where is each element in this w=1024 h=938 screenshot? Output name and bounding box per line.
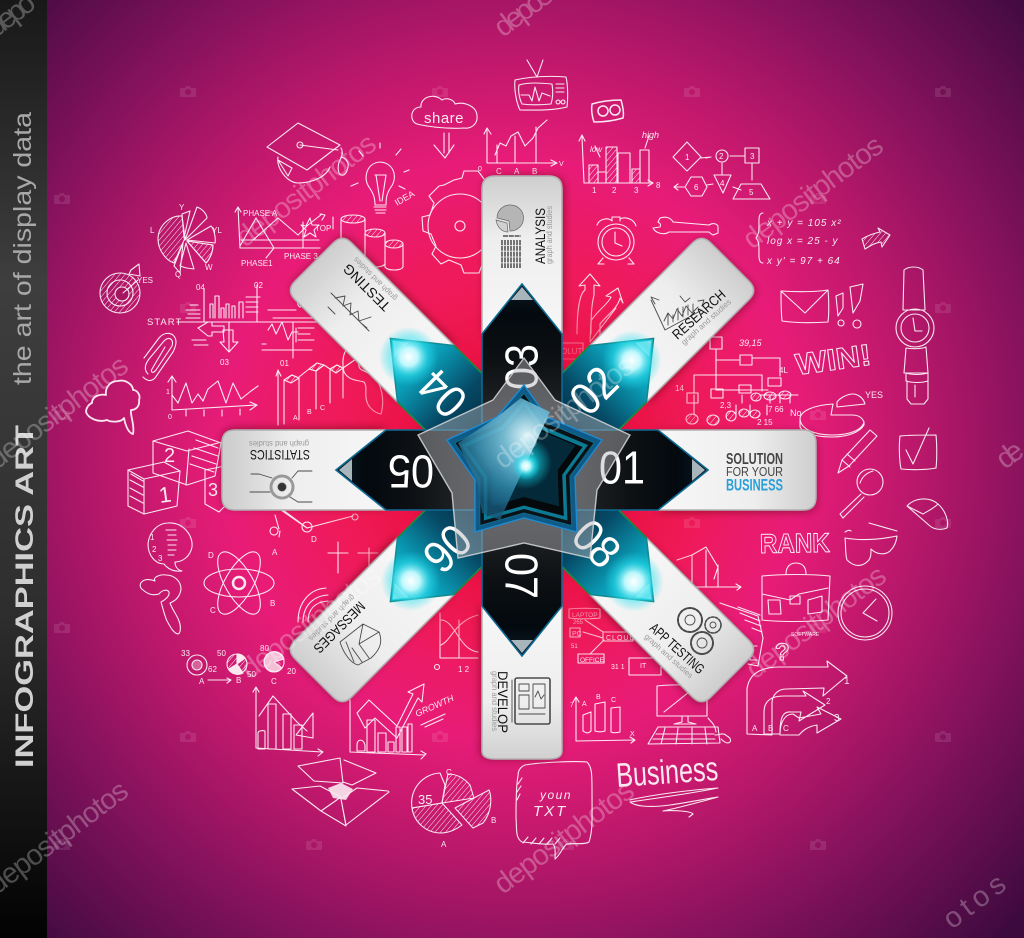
doodle: desktop computer xyxy=(648,685,731,744)
doodle: growth chart: GROWTH xyxy=(414,693,456,719)
doodle: concentric arcs behind messages xyxy=(298,588,328,622)
doodle: cloud computing diagram: OFFICE xyxy=(580,657,604,664)
doodle: network under statistics xyxy=(270,510,358,544)
arm 08 app testing xyxy=(494,442,758,706)
doodle: math equations: log x = 25 - y xyxy=(767,236,839,247)
doodle: sunglasses xyxy=(845,523,897,565)
doodle: thought cloud xyxy=(86,381,140,434)
doodle: org chart: 14 xyxy=(675,384,684,393)
doodle: growth chart xyxy=(350,684,456,759)
doodle: your txt speech bubble: TXT xyxy=(533,803,567,820)
doodle: high-low bar chart: 8 xyxy=(656,181,661,190)
doodle: atom xyxy=(204,546,278,620)
doodle: start timeline: 04 xyxy=(196,283,205,292)
arm 05 statistics: graph and studies xyxy=(249,439,309,448)
doodle: phase line chart xyxy=(235,207,333,268)
doodle: hidden arrows behind arms xyxy=(561,274,623,359)
doodle: high-low bar chart: 3 xyxy=(634,186,639,195)
doodle: mountain chart: 0 xyxy=(478,166,482,173)
doodle: wave line chart: 0 xyxy=(168,414,172,421)
doodle: wave line chart: 1 xyxy=(166,389,170,396)
doodle: three direction arrows: A xyxy=(752,724,758,733)
doodle: dragon tail shape xyxy=(343,350,383,414)
doodle: list speech bubble: 2 xyxy=(152,545,157,554)
doodle: hatched pie chart left xyxy=(150,203,222,279)
label solution for your business: BUSINESS xyxy=(726,476,783,494)
doodle: phase line chart: PHASE 3 xyxy=(284,252,318,261)
inner star layers xyxy=(447,385,602,532)
doodle: go tag xyxy=(592,100,623,122)
doodle: atom: D xyxy=(208,551,214,560)
arm 03 analysis xyxy=(482,176,562,470)
doodle: checkbox xyxy=(899,428,937,470)
doodle: business lettering: Business xyxy=(615,750,719,795)
doodle: wave line chart xyxy=(166,376,258,421)
doodle: book stack xyxy=(720,603,763,666)
doodle: three mini pies: 50 xyxy=(217,649,226,658)
doodle: three mini pies: 20 xyxy=(287,667,296,676)
doodle: lower pie chart: B xyxy=(491,816,496,825)
doodle: business lettering xyxy=(615,750,719,817)
arm 02 research xyxy=(494,234,758,498)
doodle: three mini pies: 33 xyxy=(181,649,190,658)
label statistics: STATISTICS xyxy=(250,447,310,463)
doodle: open box xyxy=(292,758,389,826)
doodle: hatched pie chart left: Q xyxy=(175,270,181,279)
number 06: 06 xyxy=(413,514,482,583)
doodle: abc bar chart: B xyxy=(596,694,601,701)
doodle: abc bar chart xyxy=(570,694,635,743)
doodle: gear xyxy=(422,171,519,273)
arm 05 statistics xyxy=(222,430,522,510)
doodle: wave chart: 1 2 xyxy=(458,665,470,674)
doodle: three direction arrows xyxy=(747,661,850,735)
doodle: three mini pies: 62 xyxy=(208,665,217,674)
doodle: light bulb idea: IDEA xyxy=(393,189,416,208)
icon: gears xyxy=(678,608,721,654)
doodle: start timeline: 01 xyxy=(280,359,289,368)
icon: testing chart xyxy=(328,293,371,331)
doodle: coin pie: No xyxy=(790,408,802,418)
doodle: high-low bar chart: 2 xyxy=(612,186,617,195)
doodle: flowchart: 5 xyxy=(749,188,754,197)
doodle: flowchart: 6 xyxy=(694,183,699,192)
doodle: briefcase xyxy=(762,563,830,622)
doodle: exclamation marks xyxy=(836,284,863,328)
doodle: cross figures xyxy=(328,542,378,573)
doodle: three direction arrows: 2 xyxy=(826,697,831,706)
doodle: high-low bar chart xyxy=(579,130,661,195)
label messages: MESSAGES xyxy=(311,599,369,657)
doodle: flowchart: 3 xyxy=(750,152,755,161)
doodle: question mark: ? xyxy=(775,639,790,666)
doodle: atom: B xyxy=(270,599,275,608)
doodle: share cloud: share xyxy=(424,110,464,127)
doodle: math equations: x + y = 105 x² xyxy=(766,218,842,229)
doodle: lower pie chart: 35 xyxy=(418,792,432,807)
doodle: your txt speech bubble xyxy=(516,762,592,859)
label analysis: ANALYSIS xyxy=(532,208,548,264)
doodle: three mini pies: 50 xyxy=(247,670,256,679)
arrow 04 xyxy=(359,307,550,498)
doodle: curved small arrow xyxy=(862,228,890,249)
doodle: number cubes: 3 xyxy=(208,480,218,500)
doodle: hatched pie chart left: L xyxy=(150,226,155,235)
doodle: pencil xyxy=(838,430,877,473)
label research: RESEARCH xyxy=(669,286,729,342)
doodle: number cubes: 1 xyxy=(157,481,173,508)
watermarks: depositphotos xyxy=(488,350,641,476)
doodle: paper clip xyxy=(143,333,176,381)
label testing: TESTING xyxy=(340,261,393,314)
watermarks: depositphotos xyxy=(740,560,893,686)
doodle: start timeline: START xyxy=(147,317,182,328)
doodle sketches xyxy=(86,60,948,859)
doodle: mountain chart: B xyxy=(532,167,537,176)
doodle: magnifier xyxy=(840,469,883,518)
doodle: hatched pie chart left: W xyxy=(205,263,213,272)
doodle: cloud computing diagram: 31 1 xyxy=(611,664,625,671)
doodle: hatched pie chart left: YL xyxy=(212,226,222,235)
watermarks: depositphotos xyxy=(230,128,383,254)
strip title: INFOGRAPHICS ART xyxy=(11,425,39,768)
glass star xyxy=(418,358,630,558)
arrow 07 xyxy=(482,470,562,656)
label develop: DEVELOP xyxy=(495,671,511,733)
icon: develop screen xyxy=(512,678,550,724)
doodle: win sketch lettering: WIN! xyxy=(793,339,873,382)
arm 02 research: graph and studies xyxy=(680,297,733,347)
doodle: phase line chart: TOP xyxy=(315,224,331,233)
central star xyxy=(418,358,630,558)
arm 01 solution xyxy=(522,430,816,510)
doodle: list speech bubble xyxy=(148,523,192,571)
number 04: 04 xyxy=(408,359,477,428)
doodle: coin pie: YES xyxy=(865,390,883,400)
doodle: cloud computing diagram: 51 xyxy=(571,644,578,650)
icon: research chart xyxy=(651,296,704,330)
doodle: cloud computing diagram: LAPTOP xyxy=(572,612,598,619)
doodle: org chart: 39,15 xyxy=(739,338,763,348)
doodle: start timeline: 03 xyxy=(220,358,229,367)
doodle: number cubes xyxy=(128,431,225,514)
arrow 06 xyxy=(361,442,550,631)
doodle: three mini pies: 80 xyxy=(260,644,269,653)
doodle: phase line chart: PHASE1 xyxy=(241,259,273,268)
doodle: curly three xyxy=(140,575,181,634)
doodle: mountain chart: V xyxy=(559,161,564,168)
icon: statistics gear xyxy=(250,471,312,502)
doodle: flowchart: 4 xyxy=(720,179,725,188)
doodle: start timeline xyxy=(147,281,325,368)
doodle: cloud computing diagram: PC xyxy=(572,631,582,638)
arrow 05 xyxy=(336,430,522,510)
doodle: phase line chart: PHASE A xyxy=(243,209,278,218)
doodle: mountain chart: C xyxy=(496,167,502,176)
arm 06 messages xyxy=(286,442,550,706)
doodle: graduation cap xyxy=(267,123,348,183)
doodle: wristwatch xyxy=(896,267,934,404)
doodle: cloud computing diagram: CLOUD xyxy=(606,635,636,642)
watermarks: depositphotos xyxy=(235,560,388,686)
camera watermarks xyxy=(54,86,951,850)
number 08: 08 xyxy=(562,509,631,578)
doodle: start timeline: 02 xyxy=(254,281,263,290)
icon: analysis pie and bars xyxy=(496,205,524,268)
glass highlight xyxy=(458,398,550,520)
number 03: 03 xyxy=(496,344,548,390)
doodle: high-low bar chart: 1 xyxy=(592,186,597,195)
arm 04 testing: graph and studies xyxy=(352,255,399,302)
doodle: org chart xyxy=(675,337,798,427)
doodle: 3d bar chart: A xyxy=(293,415,298,422)
doodle: cloud computing diagram xyxy=(569,608,661,675)
doodle: org chart: 2,3 xyxy=(720,401,732,410)
doodle: high-low bar chart: high xyxy=(642,130,659,140)
doodle: three mini pies xyxy=(181,644,296,686)
star glow xyxy=(512,452,540,480)
doodle: coin pie xyxy=(790,390,883,437)
label solution for your business: SOLUTION xyxy=(726,451,783,468)
central shadow xyxy=(317,265,727,675)
doodle: 3d bar chart: B xyxy=(307,409,312,416)
doodle: alarm clock xyxy=(597,217,636,264)
watermarks: depositphotos xyxy=(488,775,641,901)
label solution for your business xyxy=(726,451,783,494)
label app testing: APP TESTING xyxy=(647,620,708,677)
arm 04 testing xyxy=(286,234,550,498)
doodle: list speech bubble: 1 xyxy=(150,533,155,542)
left title strip xyxy=(0,0,47,938)
doodle: computer mouse xyxy=(907,499,948,529)
doodle: spiral target yes xyxy=(100,264,153,313)
doodle: three direction arrows: B xyxy=(768,724,773,733)
doodle: software label: SOFTWARE xyxy=(791,632,820,638)
doodle: 3d bar chart: C xyxy=(320,405,325,412)
doodle: share cloud xyxy=(412,96,477,158)
icon: messages xyxy=(340,624,381,665)
doodle: tv xyxy=(515,60,568,110)
doodle: 3d bar chart xyxy=(276,353,364,425)
doodle: flowchart: 2 xyxy=(719,152,724,161)
doodle: abc bar chart: X xyxy=(630,731,635,738)
doodle: hidden arrows behind arms: OLUT xyxy=(561,347,582,356)
doodle: cylinders xyxy=(341,215,403,270)
arm 07 develop: graph and studies xyxy=(490,671,499,731)
arm 03 analysis: graph and studies xyxy=(545,206,554,264)
arrow 08 xyxy=(494,442,683,631)
doodle: math equations xyxy=(756,213,842,267)
doodle: abc bar chart: C xyxy=(611,697,616,704)
number 01: 01 xyxy=(599,442,645,494)
doodle: abc bar chart: A xyxy=(582,701,587,708)
doodle: flowchart xyxy=(673,142,770,199)
doodle: three direction arrows: C xyxy=(783,724,789,733)
arrow 01 xyxy=(522,430,708,510)
doodle: falling bar chart xyxy=(253,687,323,756)
number 07: 07 xyxy=(495,553,547,599)
doodle: lower pie chart xyxy=(412,768,496,849)
doodle: math equations: x y' = 97 + 64 xyxy=(766,256,841,267)
doodle: wrench xyxy=(653,217,718,235)
doodle: wave chart xyxy=(434,613,478,674)
doodle: mountain chart: A xyxy=(514,167,520,176)
doodle: spiral target yes: YES xyxy=(137,276,153,285)
doodle: mountain chart xyxy=(478,120,564,176)
doodle: rank lettering: RANK xyxy=(760,528,831,559)
doodle: high-low bar chart: low xyxy=(590,145,603,154)
doodle: three mini pies: C xyxy=(271,677,277,686)
doodle: atom: A xyxy=(272,548,278,557)
doodle: light bulb idea xyxy=(351,143,416,213)
label solution for your business: FOR YOUR xyxy=(726,465,783,479)
doodle: envelope xyxy=(781,290,829,323)
doodle: three direction arrows: 3 xyxy=(834,713,840,724)
doodle: list speech bubble: 3 xyxy=(158,554,163,563)
watermarks: depositphotos xyxy=(737,130,890,256)
arm 07 develop xyxy=(482,470,562,759)
doodle: org chart: 2 15 xyxy=(757,418,773,427)
doodle: abc bar chart: 7 xyxy=(570,702,574,709)
doodle: hatched pie chart left: Y xyxy=(179,203,185,212)
doodle: three mini pies: A xyxy=(199,677,205,686)
arm 06 messages: graph and studies xyxy=(307,593,357,643)
doodle: number cubes: 2 xyxy=(164,445,175,467)
doodle: flowchart: 1 xyxy=(685,153,690,162)
arrow 02 xyxy=(494,310,682,498)
doodle: wall clock xyxy=(838,586,892,640)
doodle: lower pie chart: C xyxy=(446,768,452,777)
doodle: atom: C xyxy=(210,606,216,615)
doodle: peak chart xyxy=(677,547,741,590)
doodle: cloud computing diagram: IT xyxy=(640,663,647,670)
doodle: cloud computing diagram: 265 xyxy=(573,620,584,626)
doodle: lower pie chart: A xyxy=(441,840,447,849)
arrow 03 xyxy=(482,284,562,470)
doodle: your txt speech bubble: youn xyxy=(539,788,572,802)
tagline: the art of display data xyxy=(9,112,37,385)
doodle: three direction arrows: 1 xyxy=(844,676,850,687)
arm 08 app testing: graph and studies xyxy=(643,632,695,680)
number 02: 02 xyxy=(559,356,628,425)
number 05: 05 xyxy=(388,445,434,497)
doodle: three mini pies: B xyxy=(236,676,241,685)
doodle: org chart: 4L xyxy=(779,366,788,375)
doodle: network under statistics: D xyxy=(311,535,317,544)
doodle: org chart: 7 66 xyxy=(768,405,784,414)
watermarks: otos xyxy=(937,868,1012,936)
